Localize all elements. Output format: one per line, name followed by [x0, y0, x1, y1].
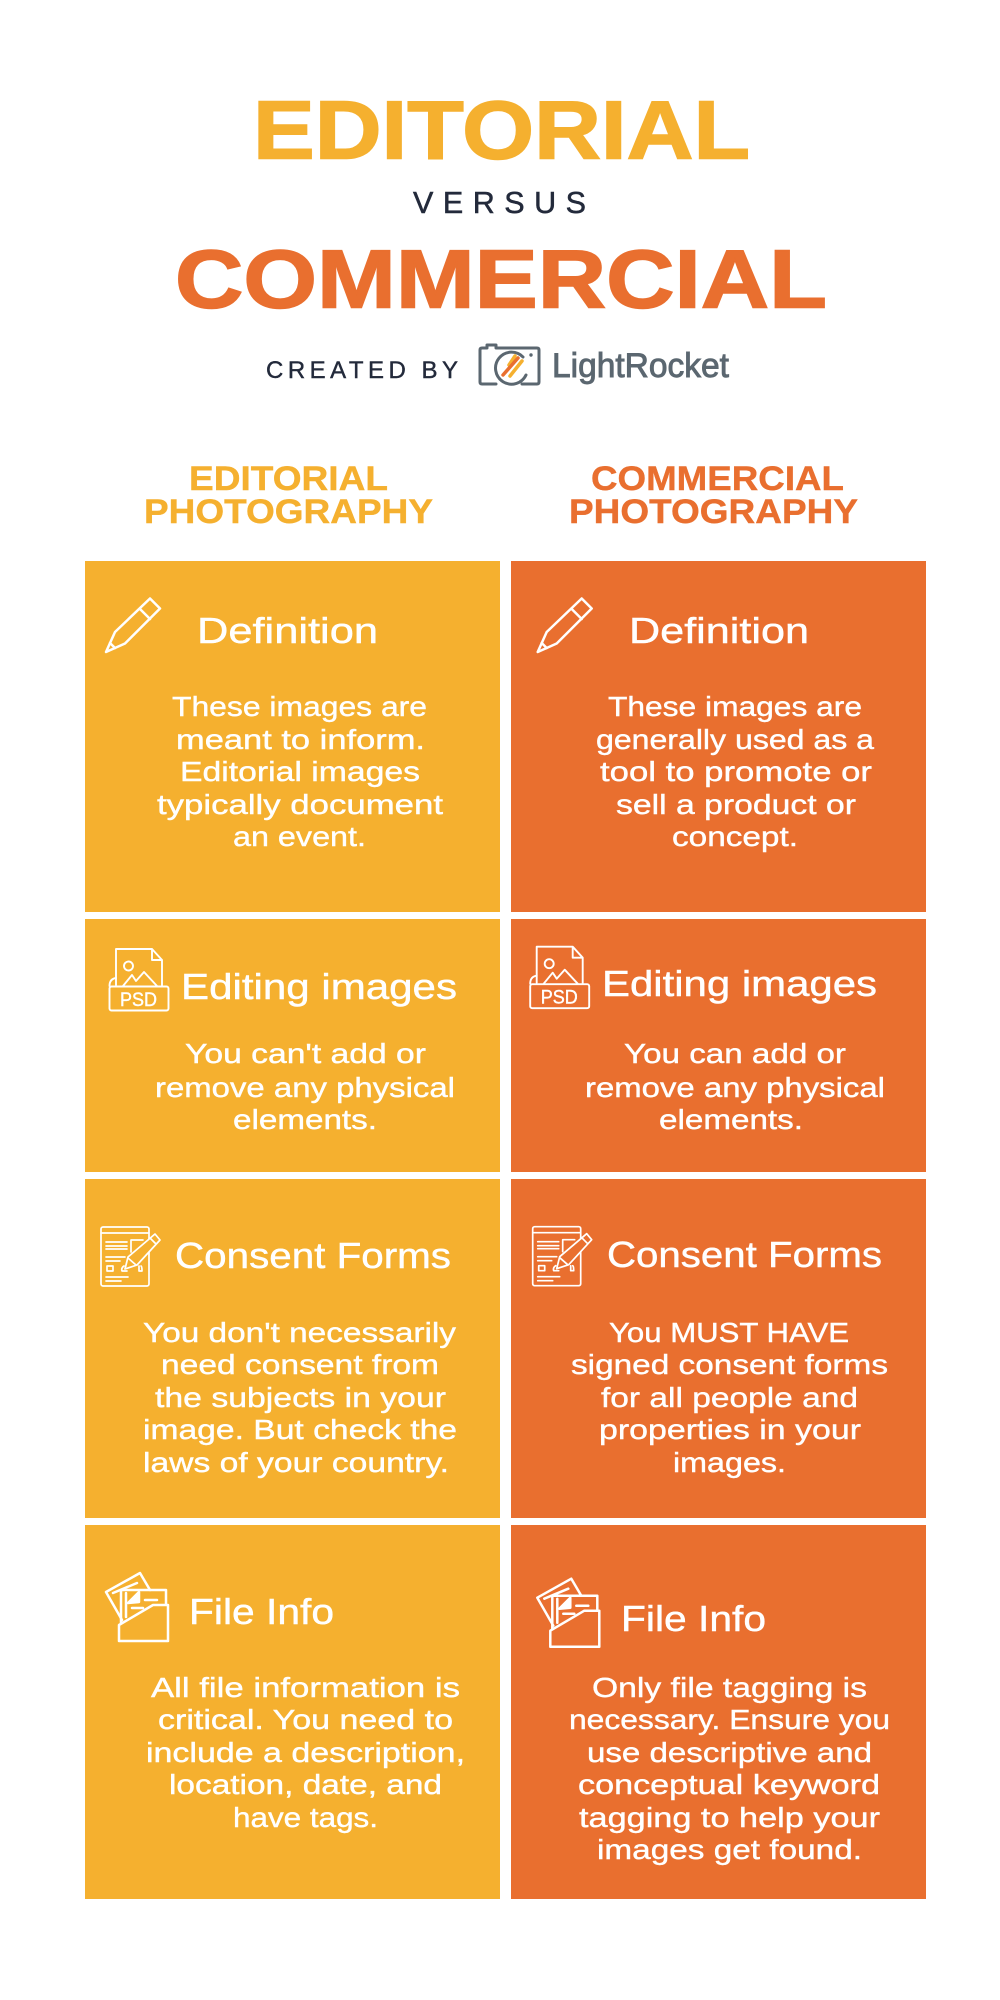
body text: tagging to help your: [579, 1802, 880, 1833]
column heading: editorial photography: EDITORIAL: [189, 460, 388, 498]
body text: [143, 1317, 457, 1478]
body text: [585, 1038, 885, 1135]
credit: created by: CREATED BY: [266, 357, 458, 384]
icon: form with pencil: [101, 1227, 160, 1286]
heading: Editing images: [181, 966, 457, 1007]
heading: Editing images: [602, 963, 877, 1004]
body text: You don't necessarily: [143, 1317, 456, 1348]
icon: folder with files: [537, 1579, 599, 1647]
body text: an event.: [233, 821, 366, 852]
icon: pencil: [538, 598, 592, 652]
column heading: commercial photography: [569, 460, 858, 531]
body text: You MUST HAVE: [609, 1317, 849, 1348]
body text: the subjects in your: [155, 1382, 446, 1413]
icon: PSD file: [530, 947, 589, 1009]
body text: These images are: [172, 691, 427, 722]
body text: critical. You need to: [158, 1704, 453, 1735]
body text: tool to promote or: [600, 756, 872, 787]
heading: Consent Forms: [175, 1235, 451, 1276]
body text: signed consent forms: [571, 1349, 888, 1380]
body text: remove any physical: [585, 1072, 885, 1103]
body text: generally used as a: [596, 724, 874, 755]
heading: File Info: [189, 1591, 334, 1632]
body text: use descriptive and: [587, 1737, 872, 1768]
body text: have tags.: [233, 1802, 378, 1833]
body text: You can add or: [624, 1038, 846, 1069]
heading: Consent Forms: [607, 1234, 882, 1275]
icon: camera logo: [480, 345, 539, 384]
body text: [596, 691, 874, 852]
body text: images get found.: [597, 1834, 862, 1865]
body text: for all people and: [601, 1382, 858, 1413]
body text: need consent from: [161, 1349, 439, 1380]
column heading: commercial photography: PHOTOGRAPHY: [569, 493, 858, 531]
body text: concept.: [672, 821, 798, 852]
body text: meant to inform.: [176, 724, 425, 755]
body text: sell a product or: [616, 789, 856, 820]
icon: PSD file: [110, 949, 168, 1011]
body text: Only file tagging is: [592, 1672, 867, 1703]
body text: location, date, and: [169, 1769, 442, 1800]
title block: [175, 84, 827, 385]
panel: editorial file info: [85, 1525, 500, 1899]
icon: form with pencil: [533, 1227, 592, 1286]
body text: [571, 1317, 888, 1478]
icon: pencil: [106, 598, 160, 652]
column heading: editorial photography: PHOTOGRAPHY: [144, 493, 433, 531]
heading: Definition: [629, 610, 809, 651]
title: EDITORIAL: EDITORIAL: [253, 84, 750, 176]
panel: editorial editing images: [85, 919, 500, 1172]
body text: [157, 691, 443, 852]
column heading: editorial photography: [144, 460, 433, 531]
panel: editorial consent forms: [85, 1179, 500, 1518]
body text: laws of your country.: [143, 1447, 449, 1478]
body text: elements.: [233, 1104, 377, 1135]
body text: conceptual keyword: [578, 1769, 880, 1800]
panel: commercial editing images: [511, 919, 926, 1172]
logo wordmark: LightRocket: [552, 347, 730, 385]
panel: commercial consent forms: [511, 1179, 926, 1518]
body text: These images are: [608, 691, 862, 722]
heading: File Info: [621, 1598, 766, 1639]
body text: image. But check the: [143, 1414, 457, 1445]
panel: editorial definition: [85, 561, 500, 912]
column heading: commercial photography: COMMERCIAL: [591, 460, 844, 498]
heading: Definition: [197, 610, 378, 651]
logo: LightRocket: [480, 345, 730, 385]
body text: Editorial images: [180, 756, 420, 787]
body text: elements.: [659, 1104, 803, 1135]
body text: All file information is: [151, 1672, 460, 1703]
body text: properties in your: [599, 1414, 861, 1445]
icon: PSD file: PSD: [120, 990, 157, 1011]
body text: [155, 1038, 455, 1135]
body text: images.: [673, 1447, 786, 1478]
subtitle: VERSUS: VERSUS: [413, 186, 586, 220]
panel: commercial definition: [511, 561, 926, 912]
panel: commercial file info: [511, 1525, 926, 1899]
body text: [569, 1672, 890, 1865]
body text: typically document: [157, 789, 443, 820]
icon: folder with files: [106, 1573, 168, 1641]
title: COMMERCIAL: COMMERCIAL: [175, 232, 827, 326]
body text: necessary. Ensure you: [569, 1704, 890, 1735]
body text: include a description,: [146, 1737, 465, 1768]
icon: PSD file: PSD: [541, 988, 578, 1009]
body text: You can't add or: [185, 1038, 426, 1069]
body text: [146, 1672, 465, 1833]
body text: remove any physical: [155, 1072, 455, 1103]
